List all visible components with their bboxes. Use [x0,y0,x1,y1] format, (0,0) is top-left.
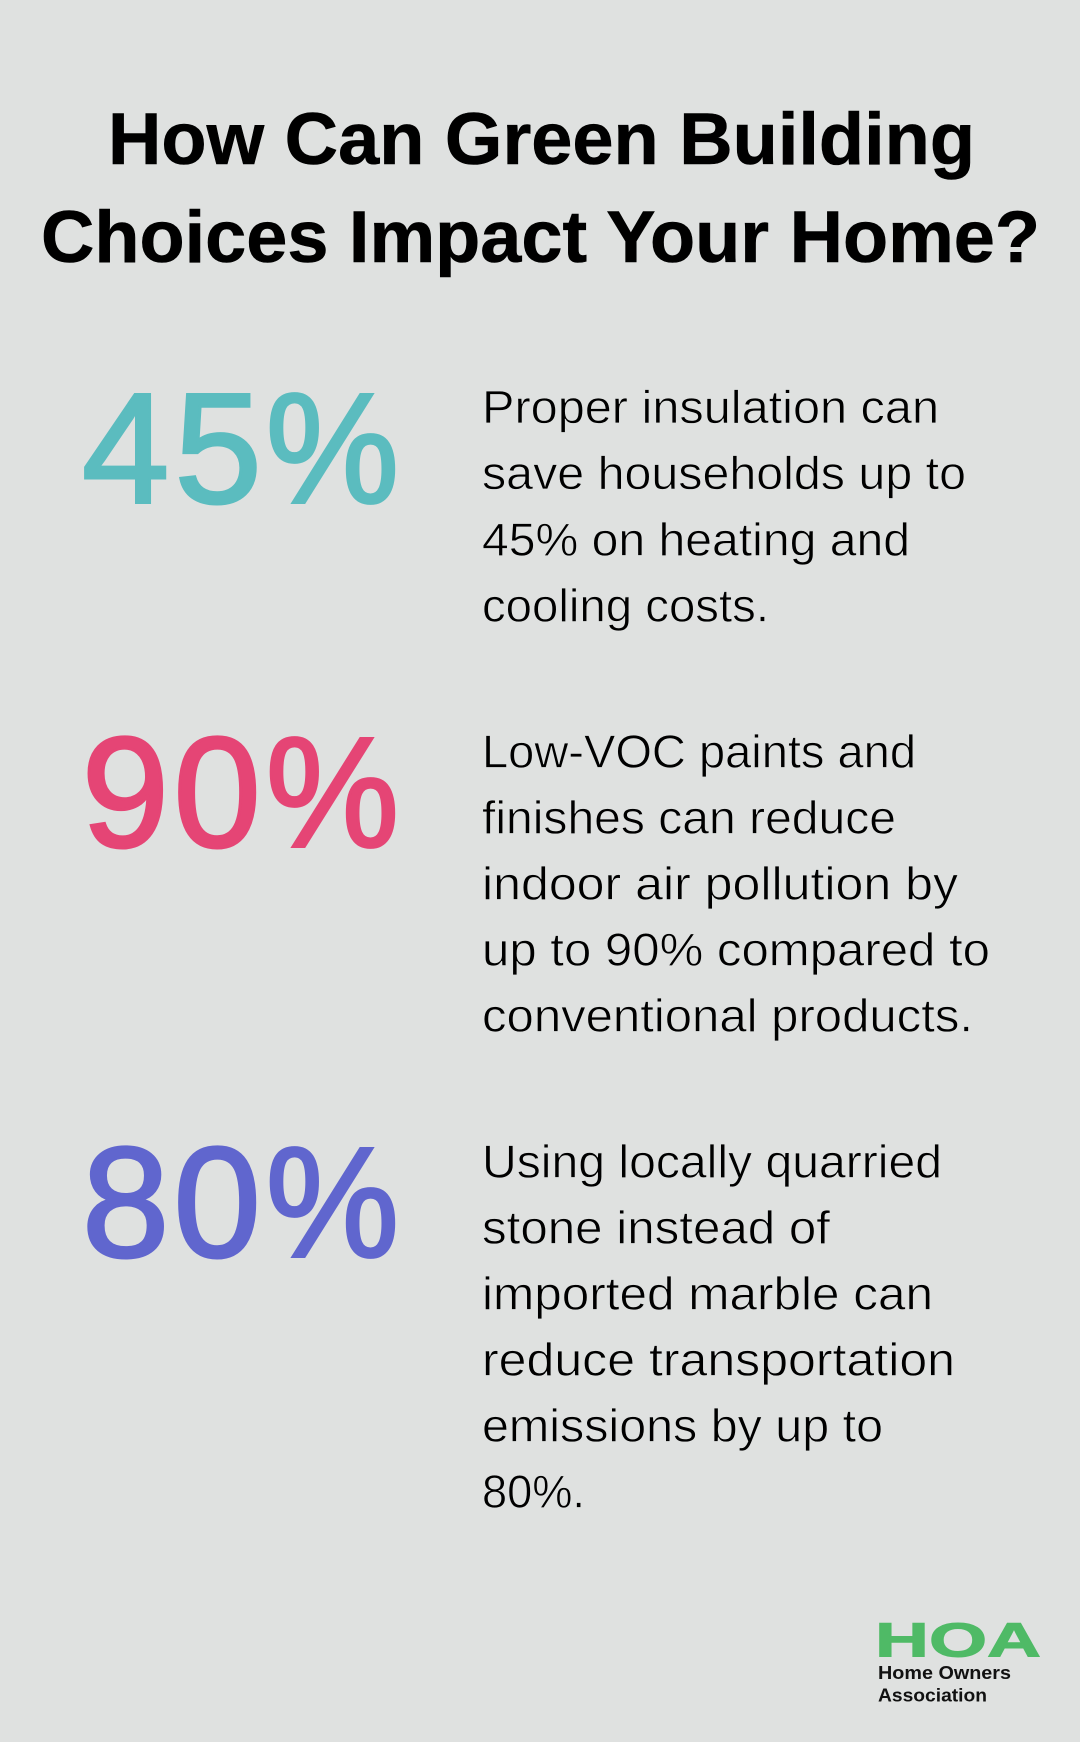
logo text: Home Owners Association: Association [878,1684,987,1706]
text block: insulation: cooling costs. [482,580,769,632]
logo mark: HOA: HOA [875,1614,1041,1668]
text block: low-VOC paints: indoor air pollution by [482,858,958,910]
text block: local stone: emissions by up to [482,1400,883,1452]
text block: local stone: imported marble can [482,1268,933,1320]
text block: insulation: Proper insulation can [482,381,939,433]
panel: low-VOC stat [82,706,990,1042]
text block: insulation [482,381,966,632]
big number: 80%: % [266,1116,399,1290]
big number: 80%: 80 [82,1116,261,1290]
big number: 45%: % [266,362,399,536]
big number: 45%: 45 [82,362,262,536]
text block: local stone: 80%. [482,1466,585,1518]
panel: insulation stat [82,362,966,632]
panel: local stone stat [82,1116,955,1518]
text block: local stone: stone instead of [482,1202,830,1254]
text block: low-VOC paints: up to 90% compared to [482,924,990,976]
text block: local stone [482,1136,955,1518]
text block: low-VOC paints: finishes can reduce [482,792,896,844]
text block: low-VOC paints: conventional products. [482,990,973,1042]
logo text: Home Owners Association: Home Owners [878,1662,1011,1683]
title: Choices Impact Your Home? [41,195,1040,278]
text block: local stone: Using locally quarried [482,1136,942,1188]
text block: local stone: reduce transportation [482,1334,955,1386]
big number: 90%: 90 [82,706,261,880]
text block: low-VOC paints: Low-VOC paints and [482,726,916,778]
text block: insulation: save households up to [482,447,966,499]
logo: HOA Home Owners Association [875,1614,1041,1706]
title: How Can Green Building [108,97,975,180]
text block: insulation: 45% on heating and [482,514,910,566]
big number: 90%: % [266,706,399,880]
title [41,97,1040,278]
logo text: Home Owners Association [878,1662,1011,1706]
text block: low-VOC paints [482,726,990,1042]
